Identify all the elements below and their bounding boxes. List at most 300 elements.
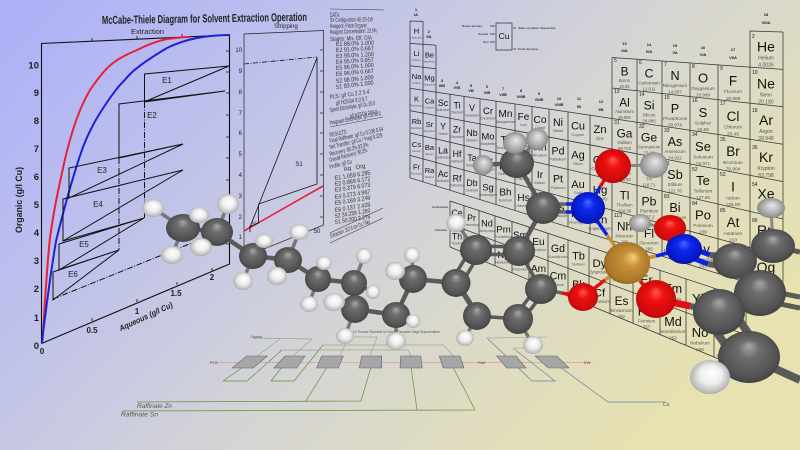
stripping y labels: 8 xyxy=(239,90,243,96)
atomic numbers: 33 xyxy=(664,128,670,134)
group 13: Boron xyxy=(619,78,631,83)
group 17: Ts xyxy=(726,250,740,265)
groups 1 and 2: Ra xyxy=(425,166,434,175)
group 18: Oganesson xyxy=(753,276,779,282)
data and results text column: Pregnant Electrolyte: g/l Cu 50.0 xyxy=(329,111,382,127)
group 16: 293 xyxy=(699,264,707,268)
transition metals: Rf xyxy=(453,173,461,183)
group 17: Cl xyxy=(727,109,739,124)
atomic numbers: 36 xyxy=(752,145,758,151)
x axis labels: 2 xyxy=(210,273,215,282)
group labels: IVA xyxy=(646,49,652,54)
group 16: 32.06 xyxy=(697,127,709,132)
transition metals: Hassium xyxy=(517,204,530,208)
lanthanide and actinide elements: Cf xyxy=(594,288,605,300)
group 17: Chlorum xyxy=(724,125,742,131)
group 15: P xyxy=(671,102,679,116)
transition metals: Hf xyxy=(453,149,461,159)
data and results text column: E2 91.0% 0.667 xyxy=(336,46,375,54)
data and results text column: E5 96.0% 1.000 xyxy=(336,63,375,72)
transition metals: Cadmium xyxy=(591,166,609,171)
data and results text column: Org xyxy=(355,164,366,171)
group labels: VIIA xyxy=(729,55,737,60)
group 13: 26.982 xyxy=(618,115,632,120)
stripping stage labels xyxy=(252,162,303,225)
lanthanide and actinide elements: Holmium xyxy=(613,278,630,283)
group labels: IIIA xyxy=(621,48,628,53)
data and results text column: E6 96.0% 0.667 xyxy=(336,69,375,78)
group 17: I xyxy=(731,180,735,195)
groups 1 and 2: Hydrogen xyxy=(411,36,423,40)
transition metals: Copper xyxy=(572,132,585,137)
transition metals: Rg xyxy=(571,208,585,220)
lanthanide and actinide elements: Sm xyxy=(513,231,528,242)
group 15: Phosphorus xyxy=(663,116,688,121)
data and results text column: S1 50.000 2.276 xyxy=(334,214,371,226)
transition metals: Pd xyxy=(552,145,564,157)
data and results text column: Extraction: 207.8 ton Cu / day xyxy=(330,219,371,240)
group 17: Fluorum xyxy=(724,89,742,95)
transition metals: Bohrium xyxy=(499,198,512,202)
transition metals xyxy=(435,98,612,231)
transition metals: Meitnerium xyxy=(531,209,549,213)
transition metals: Vanadium xyxy=(465,114,479,118)
group 13: Indium xyxy=(618,171,631,176)
atomic numbers: 17 xyxy=(720,101,726,107)
transition metals: Mn xyxy=(499,109,512,120)
group labels: VIA xyxy=(700,52,706,57)
transition metals: Rh xyxy=(533,143,547,154)
group 18: Ne xyxy=(757,75,775,91)
data and results text column xyxy=(329,9,384,243)
transition metals: Mercury xyxy=(593,196,608,201)
data and results text column: PLS: g/l Cu 2.2 5.4 xyxy=(329,89,370,101)
transition metals: Ru xyxy=(517,139,530,150)
ball-and-stick molecule xyxy=(142,128,800,394)
stage labels: E2 xyxy=(147,111,157,120)
stripping y labels: 5 xyxy=(239,152,243,158)
data and results text column: DATA: xyxy=(330,13,340,19)
lanthanide and actinide grid xyxy=(450,201,746,370)
group labels: IIA xyxy=(426,34,432,39)
transition metals: Technetium xyxy=(496,146,515,150)
stream labels: Organic xyxy=(250,335,263,339)
y axis labels: 0 xyxy=(34,341,39,352)
table grid xyxy=(410,21,783,294)
group 18: Ar xyxy=(759,112,773,128)
atomic numbers: 86 xyxy=(752,218,758,224)
lanthanide and actinide elements: Thorium xyxy=(451,241,463,245)
groups 1 and 2: Potassium xyxy=(410,104,424,108)
lanthanide and actinide elements: Fm xyxy=(638,304,655,318)
mixer-settler boxes xyxy=(232,356,569,368)
atomic numbers: 34 xyxy=(692,132,698,138)
transition metals: Actinium xyxy=(437,179,449,183)
group 18: Neon xyxy=(760,92,772,98)
group 17: 126.90 xyxy=(726,202,741,208)
group labels: 5 xyxy=(470,83,473,88)
stripping y labels: 6 xyxy=(239,131,243,137)
lanthanide and actinide elements: Tb xyxy=(572,250,585,262)
group labels: IIIB xyxy=(439,83,445,88)
transition metals: Darmstadt xyxy=(549,214,568,218)
lanthanide and actinide elements: Berkelium xyxy=(570,290,588,295)
group 16: Tellurium xyxy=(694,188,712,194)
group 13: Nihonium xyxy=(616,233,634,238)
group 18: Krypton xyxy=(757,166,775,172)
stage labels: E1 xyxy=(162,76,172,85)
group labels: IA xyxy=(414,12,418,17)
groups 1 and 2: Sodium xyxy=(412,81,422,85)
group 14: Sn xyxy=(642,163,656,177)
transition metals: Ni xyxy=(553,117,563,129)
data and results text column: S2 98.0% 1.000 xyxy=(336,75,375,85)
group 16: Lv xyxy=(696,242,710,256)
atomic numbers: 52 xyxy=(692,167,698,173)
group 13: Gallium xyxy=(617,140,632,145)
group labels: VB xyxy=(468,88,474,93)
group 17: F xyxy=(729,73,737,88)
group labels: 3 xyxy=(441,78,444,83)
atomic numbers: 32 xyxy=(639,124,645,130)
transition metals: Tantalum xyxy=(466,164,479,168)
lanthanide and actinide elements: 257 xyxy=(643,324,651,329)
group 16: O xyxy=(698,71,708,86)
lanthanide and actinide elements: Fermium xyxy=(638,318,655,323)
stage labels: E5 xyxy=(79,240,89,249)
group 13: Thallium xyxy=(616,202,633,207)
group 15: Sb xyxy=(667,168,683,182)
group 14: 12.011 xyxy=(642,87,656,92)
atomic numbers: 6 xyxy=(639,60,642,66)
group 14: Fl xyxy=(644,227,654,241)
group 16: Oxygenium xyxy=(691,86,715,91)
group 18: Kr xyxy=(759,149,773,165)
y axis labels: 3 xyxy=(34,256,39,267)
transition metals: Rutherford xyxy=(450,184,465,188)
transition metals: Fe xyxy=(518,112,529,123)
group 18: 4.0026 xyxy=(758,63,774,69)
data and results text column: E4 95.0% 0.857 xyxy=(336,57,375,66)
group 18 xyxy=(753,39,779,289)
group 13: In xyxy=(620,157,629,171)
groups 1 and 2: Mg xyxy=(424,74,435,82)
red stripping equilibrium line xyxy=(244,186,323,231)
element key: Numéro atomique xyxy=(462,24,483,28)
lanthanide and actinide elements: U xyxy=(484,243,490,253)
lanthanide and actinide elements: Lutetium xyxy=(721,317,739,323)
element key: Poids atomique xyxy=(518,47,539,51)
data and results text column: Overall Recovery: 90.2% xyxy=(329,148,369,164)
lanthanide and actinide elements: Ytterbium xyxy=(690,306,710,312)
stripping stage labels: S1 xyxy=(295,162,303,168)
x axis labels: 0.5 xyxy=(86,326,98,335)
transition metals: Zr xyxy=(453,125,461,135)
lanthanide and actinide elements: Europium xyxy=(531,248,546,252)
hydrogen atoms xyxy=(142,194,730,394)
data and results text column: Recovery: 89.2% 92.0% xyxy=(329,142,370,158)
group labels: VIB xyxy=(484,90,490,95)
blue equilibrium curve xyxy=(42,35,230,343)
y axis labels: 4 xyxy=(34,228,40,239)
transition metals: Db xyxy=(466,178,478,188)
atomic numbers: 35 xyxy=(720,137,726,143)
y axis labels: 7 xyxy=(34,144,39,155)
group labels: 18 xyxy=(764,12,769,17)
group 17: Tennessine xyxy=(721,266,746,272)
transition metals: La xyxy=(438,145,448,155)
group 13: Al xyxy=(619,95,630,109)
group labels: 12 xyxy=(599,99,604,104)
group 13: 69.723 xyxy=(618,146,632,151)
group 15: Arsenicum xyxy=(664,149,686,154)
transition metals: W xyxy=(484,157,492,168)
group labels: IB xyxy=(577,104,581,109)
groups 1 and 2: Na xyxy=(412,72,421,81)
atomic numbers: 84 xyxy=(692,201,698,207)
transition metals: Palladium xyxy=(550,158,566,162)
group 13: 10.81 xyxy=(619,84,630,89)
group labels: VIIIB xyxy=(535,97,544,102)
transition metals: Ir xyxy=(537,170,543,181)
lanthanide and actinide elements: Th xyxy=(452,231,462,241)
lanthanide and actinide elements: Terbium xyxy=(571,262,586,267)
group 16 xyxy=(690,71,716,268)
group labels: 11 xyxy=(577,96,582,101)
group 14: 28.085 xyxy=(642,119,656,124)
transition metals: Hs xyxy=(517,193,530,204)
transition metals: Manganese xyxy=(496,120,515,124)
transition metals: Zinc xyxy=(596,136,604,141)
data and results text column: g/l H2SO4 6.0 0.7 xyxy=(335,97,368,107)
extraction stages staircase xyxy=(53,66,229,300)
group 15: Bi xyxy=(669,201,681,215)
groups 1 and 2: Magnesium xyxy=(423,82,437,86)
group 18: Helium xyxy=(758,56,774,62)
transition metals: Cu xyxy=(571,120,585,132)
stream labels: Cu xyxy=(663,402,670,408)
transition metals: Dubnium xyxy=(466,188,479,192)
data and results text column: S1 93.0% 1.000 xyxy=(336,80,375,91)
lanthanide and actinide elements: Thulium xyxy=(665,296,681,301)
data and results text column: Profile: g/l Cu xyxy=(329,159,353,171)
lanthanide and actinide elements: Eu xyxy=(532,237,545,248)
group 13: Tl xyxy=(620,188,629,202)
transition metals: Co xyxy=(533,115,547,126)
group 18: 39.948 xyxy=(758,136,774,142)
group labels: 7 xyxy=(502,86,505,91)
transition metals: Os xyxy=(517,166,530,177)
group 14: 207.2 xyxy=(644,215,655,220)
lanthanide and actinide elements: Pa xyxy=(466,237,477,247)
group 17: 79.904 xyxy=(726,167,741,173)
transition metals: Hg xyxy=(593,184,607,196)
group 15: 289 xyxy=(671,254,679,259)
group 15: N xyxy=(670,69,680,83)
group 13: Ga xyxy=(617,126,632,140)
chart title: McCabe-Thiele Diagram for Solvent Extraction Operation xyxy=(102,12,307,27)
x axis labels xyxy=(40,273,215,356)
transition metals: Titanium xyxy=(451,111,463,115)
chart frame xyxy=(42,34,230,344)
group 16: 78.971 xyxy=(696,161,711,166)
group 14: Si xyxy=(644,99,654,113)
transition metals: Nickel xyxy=(553,129,563,133)
lanthanide and actinide elements: Bk xyxy=(572,279,585,291)
group labels: VIIIB xyxy=(555,102,564,107)
green organic streams xyxy=(122,337,475,411)
group 15: 14.007 xyxy=(668,89,682,94)
group labels: 13 xyxy=(622,41,627,46)
extraction subtitle: Extraction xyxy=(131,29,164,36)
lanthanide and actinide elements: Am xyxy=(531,264,546,275)
transition metals: Iridium xyxy=(535,181,545,185)
groups 1 and 2: H xyxy=(414,26,419,36)
group 16: Polonium xyxy=(693,223,713,228)
group 14: Plumbum xyxy=(640,209,659,214)
element key: États oxydation fréquentiels xyxy=(519,25,556,30)
group 14: Tin xyxy=(646,177,653,182)
atomic numbers: 10 xyxy=(752,70,758,76)
group 18: 294 xyxy=(762,283,770,289)
y axis labels: 8 xyxy=(34,116,39,127)
atomic numbers: 7 xyxy=(664,62,667,68)
group labels: 10 xyxy=(557,96,562,101)
lanthanide and actinide elements: Md xyxy=(664,315,682,329)
group 15: As xyxy=(668,135,682,149)
transition metals: Cd xyxy=(593,154,607,166)
stripping subtitle: Stripping xyxy=(274,24,298,30)
group labels: VIIIA xyxy=(762,20,771,25)
transition metals: Chromium xyxy=(480,117,496,121)
stream labels: Raff xyxy=(478,360,486,365)
atomic numbers: 18 xyxy=(752,108,758,114)
group 13: 204.38 xyxy=(618,208,632,213)
transition metals: Tungsten xyxy=(481,168,495,172)
lanthanide and actinide elements: Es xyxy=(615,294,628,308)
atomic numbers: 113 xyxy=(614,213,622,219)
lanthanide and actinide elements: Gd xyxy=(551,243,565,255)
group 14: Flerovium xyxy=(639,241,659,246)
group 17: 18.998 xyxy=(726,96,741,102)
lanthanide and actinide elements: Nd xyxy=(481,218,493,228)
group 14: Pb xyxy=(642,195,656,209)
transition metals: Lanthanum xyxy=(435,156,451,160)
oxygen atoms xyxy=(568,149,686,318)
transition metals: Tc xyxy=(500,135,510,146)
group 18: Rn xyxy=(757,222,775,238)
group 17: 294 xyxy=(729,273,737,279)
group 16: Se xyxy=(695,139,711,154)
group 13: B xyxy=(621,64,628,78)
transition metals: Gold xyxy=(574,190,582,195)
group 16: Livermorium xyxy=(690,257,716,262)
group 14: C xyxy=(645,67,653,81)
stage labels xyxy=(68,76,172,279)
group 16: S xyxy=(699,105,707,120)
group 18: 222 xyxy=(762,246,770,252)
transition metals: Ag xyxy=(571,150,585,162)
red equilibrium curve xyxy=(42,37,190,343)
atomic numbers: 9 xyxy=(720,66,723,72)
lanthanide and actinide elements: Neptunium xyxy=(495,260,512,264)
stripping stages xyxy=(244,57,317,232)
lanthanide and actinide elements: Plutonium xyxy=(513,267,528,271)
groups 1 and 2: Rb xyxy=(412,117,421,126)
group 15: 74.922 xyxy=(668,155,682,160)
data and results text column: E1 1.059 6.285 xyxy=(334,170,371,182)
lanthanide and actinide elements: Einsteinium xyxy=(611,308,633,313)
lanthanide and actinide elements: Dy xyxy=(593,258,606,270)
y axis labels xyxy=(28,60,40,352)
transition metals: Bh xyxy=(499,188,512,199)
group 17: Iodum xyxy=(726,195,740,201)
groups 1 and 2: Cesium xyxy=(412,149,422,153)
data and results text column: E1 88.0% 1.000 xyxy=(336,41,375,48)
x axis labels: 1.5 xyxy=(170,289,182,298)
stream labels: PLS xyxy=(210,360,218,365)
group 18: 20.180 xyxy=(758,99,774,105)
groups 1 and 2: K xyxy=(414,94,419,104)
data and results text column: SX Configuration: 6E-2S-1W xyxy=(330,17,373,24)
group 15: 30.974 xyxy=(668,122,682,127)
panel: process flowsheet xyxy=(121,330,670,418)
y axis labels: 6 xyxy=(34,172,39,183)
atomic numbers: 53 xyxy=(720,172,726,178)
groups 1 and 2: Be xyxy=(425,50,434,59)
data and results text column: Aq xyxy=(343,166,352,173)
lanthanide and actinide elements: Curium xyxy=(552,283,564,287)
group 13: 286 xyxy=(621,239,629,244)
stripping y labels: 7 xyxy=(239,111,243,117)
data and results text column: E2 0.869 6.172 xyxy=(334,176,371,188)
lanthanide and actinide elements: Lu xyxy=(722,302,738,317)
stream labels xyxy=(121,335,670,418)
group 17 xyxy=(721,73,746,279)
transition metals: Mt xyxy=(534,198,546,209)
copper atom xyxy=(604,242,650,284)
group 17: Br xyxy=(726,144,740,159)
group 13 xyxy=(615,64,634,244)
atomic numbers: 51 xyxy=(664,161,670,167)
group labels: 14 xyxy=(647,42,652,47)
element key: Symbole xyxy=(478,32,489,36)
x axis labels: 0 xyxy=(40,347,45,356)
group labels: VIIB xyxy=(499,92,507,97)
transition metals: Sg xyxy=(482,183,494,194)
groups 1 and 2: Li xyxy=(414,49,419,58)
group 14: Germanium xyxy=(638,145,661,150)
grey hydrogen atoms xyxy=(473,128,785,232)
group 15: 121.76 xyxy=(668,188,682,193)
atomic numbers: 54 xyxy=(752,182,758,188)
lanthanide and actinide elements: Yb xyxy=(692,291,708,306)
group 14: Ge xyxy=(641,131,657,145)
transition metals: Platinum xyxy=(551,186,565,190)
transition metals: Roentgen xyxy=(569,219,587,224)
data and results text column: Reagent: Plant Organic xyxy=(330,23,367,30)
transition metals: Osmium xyxy=(517,177,530,181)
stripping stage labels: S2 xyxy=(252,220,257,225)
transition metals: Iron xyxy=(520,123,527,127)
groups 1 and 2: Barium xyxy=(425,152,435,156)
group 13: 114.82 xyxy=(618,177,631,182)
transition metals: Seaborgium xyxy=(479,193,497,197)
transition metals: Niobium xyxy=(466,138,478,142)
atomic numbers: 15 xyxy=(664,95,670,101)
stripping y labels: 9 xyxy=(239,69,243,75)
group labels: IIB xyxy=(598,107,604,112)
